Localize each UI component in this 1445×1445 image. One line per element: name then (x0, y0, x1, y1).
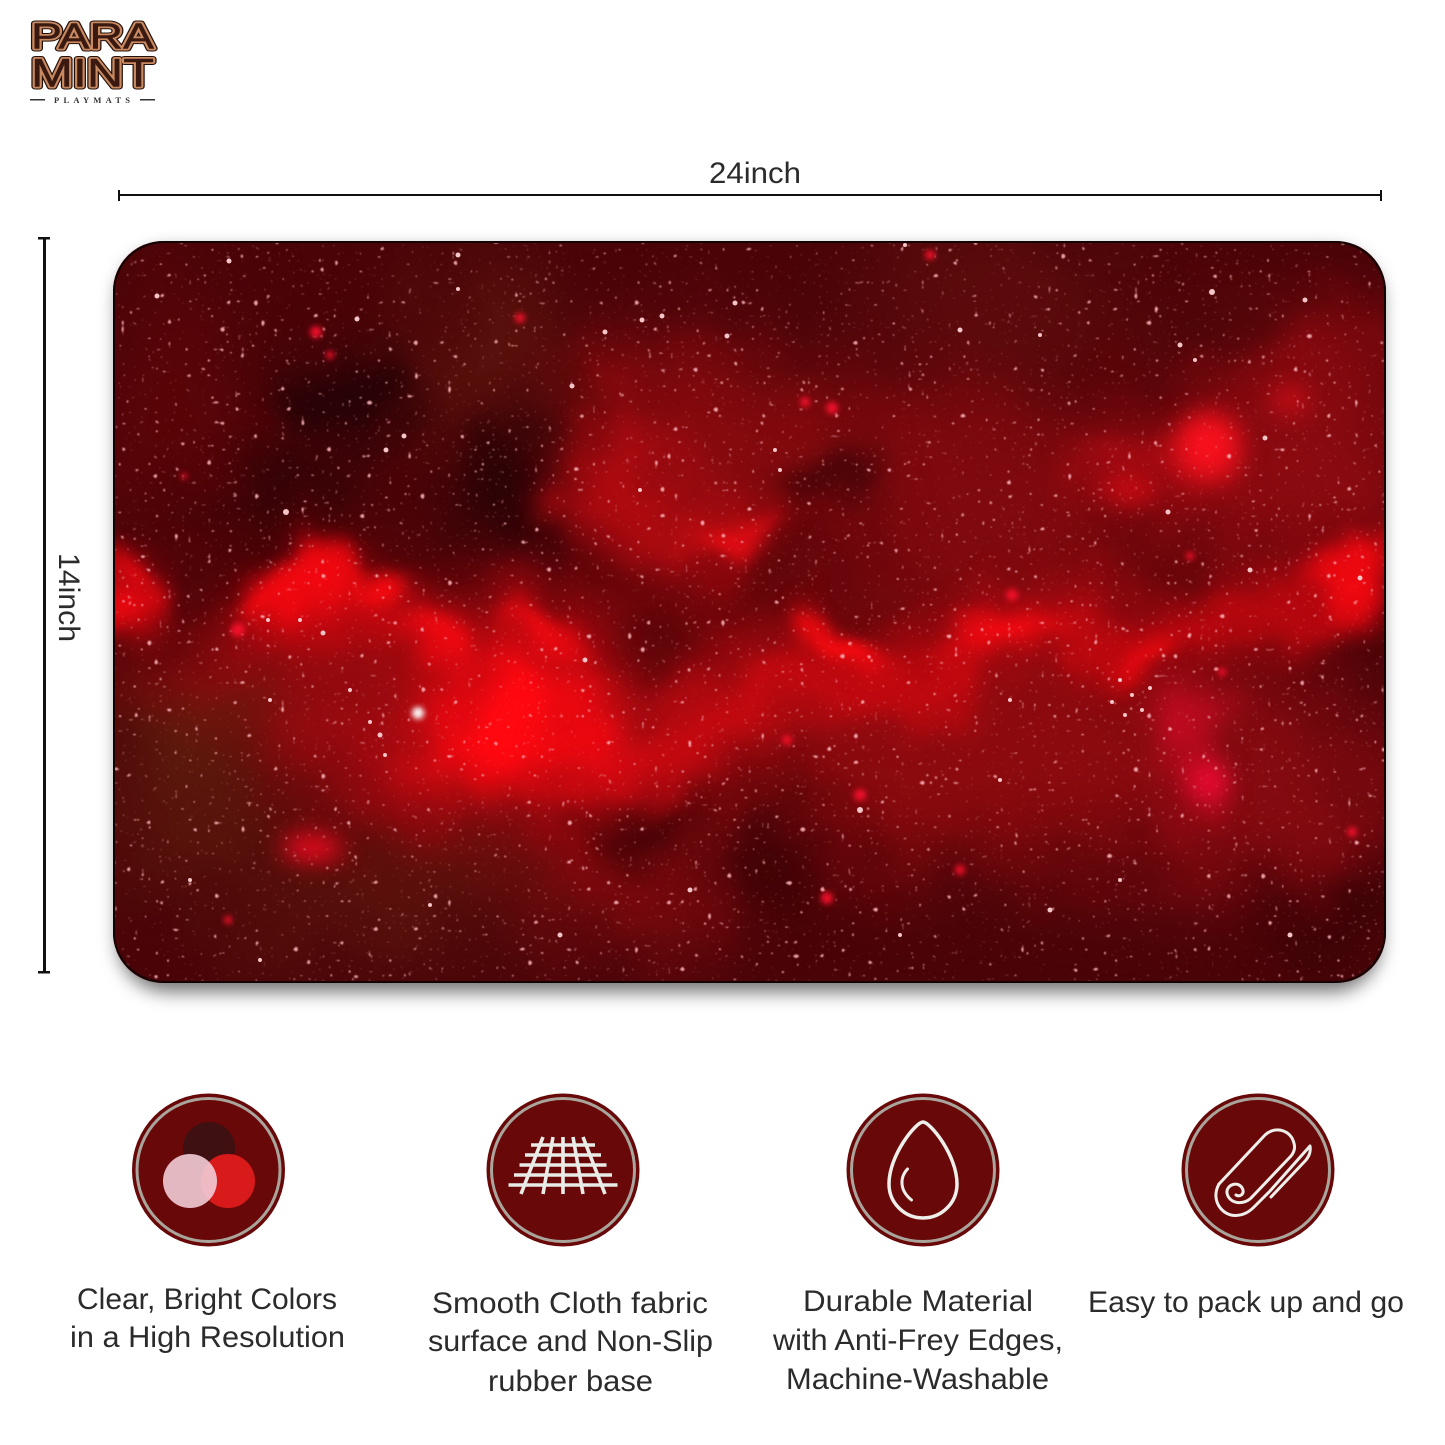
brightest cores (113, 524, 1372, 762)
glowing gas (270, 430, 1380, 810)
logo: Paramint Playmats: MINT (31, 52, 154, 96)
mat border (114, 242, 1385, 982)
icon: fabric weave grid (486, 1094, 640, 1246)
logo: Paramint Playmats: PARA (31, 16, 154, 56)
caption: Machine-Washable (786, 1363, 1049, 1396)
caption (772, 1285, 1063, 1396)
unwarped accent clouds (282, 386, 1308, 861)
caption: Smooth Cloth fabric (432, 1287, 708, 1320)
logo: Paramint Playmats: MINT (31, 52, 154, 96)
dark voids (210, 305, 1390, 960)
feature: clear bright colors (70, 1094, 345, 1354)
larger pink stars (154, 243, 1362, 962)
feature: durable material (772, 1094, 1063, 1396)
icon: colour circles (132, 1094, 285, 1246)
feature: easy to pack (1088, 1094, 1404, 1319)
width dimension: 24inch: 24inch (709, 157, 801, 190)
mat shadow (118, 250, 1381, 992)
caption (70, 1283, 345, 1354)
height dimension: 14inch: 14inch (52, 553, 85, 642)
logo: Paramint Playmats (30, 16, 155, 105)
caption: Durable Material (803, 1285, 1033, 1318)
logo: Paramint Playmats: PLAYMATS (54, 95, 130, 105)
height dimension: 14inch (38, 237, 85, 974)
caption: in a High Resolution (70, 1321, 345, 1354)
caption: with Anti-Frey Edges, (772, 1324, 1063, 1357)
icon: water drop (846, 1094, 1000, 1246)
caption (428, 1287, 713, 1398)
logo: Paramint Playmats: MINT (31, 52, 154, 96)
caption: Easy to pack up and go (1088, 1286, 1404, 1319)
playmat: red galaxy artwork (90, 241, 1430, 983)
icon: rolled mat (1182, 1094, 1334, 1246)
caption: rubber base (488, 1365, 653, 1398)
caption: surface and Non-Slip (428, 1325, 713, 1358)
nebula clouds (90, 250, 1430, 960)
logo: Paramint Playmats: PARA (31, 16, 154, 56)
glowing red stars (181, 250, 1357, 924)
white star (412, 707, 424, 719)
feature: smooth cloth surface (428, 1094, 713, 1398)
logo: Paramint Playmats: PARA (31, 16, 154, 56)
speckled stars (113, 241, 1386, 983)
caption: Clear, Bright Colors (77, 1283, 337, 1316)
